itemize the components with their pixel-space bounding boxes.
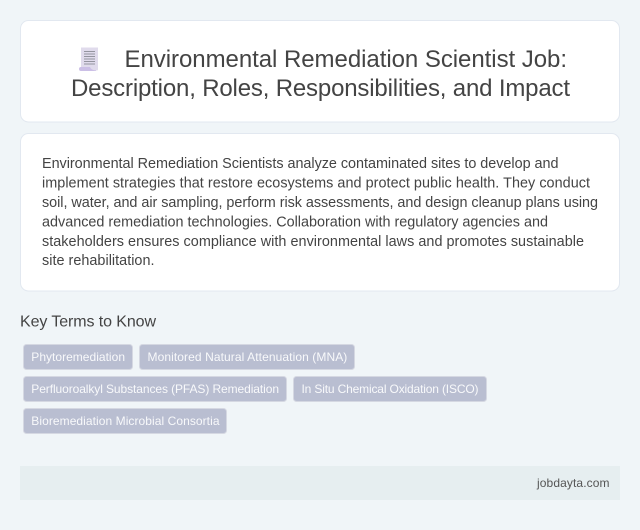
chip: PFAS: Perfluoroalkyl Substances (PFAS) Remediation	[31, 382, 279, 396]
description text	[42, 156, 598, 269]
header panel	[20, 20, 620, 122]
description text: soil, water, and air sampling, perform risk assessments, and design cleanup plans using	[42, 195, 598, 211]
chip: bioremediation	[24, 408, 226, 434]
chip: PFAS	[24, 376, 286, 402]
description text: site rehabilitation.	[42, 253, 154, 269]
description text: Environmental Remediation Scientists analyze contaminated sites to develop and	[42, 156, 558, 172]
chip: ISCO: In Situ Chemical Oxidation (ISCO)	[302, 382, 478, 396]
description text: advanced remediation technologies. Collaboration with regulatory agencies and	[42, 214, 548, 230]
key terms chips	[24, 344, 486, 434]
title	[71, 46, 570, 102]
icon: document scroll	[79, 48, 98, 71]
chip: MNA	[140, 344, 354, 370]
title: Environmental Remediation Scientist Job:	[124, 46, 567, 73]
description text: stakeholders ensures compliance with environmental laws and promotes sustainable	[42, 234, 584, 250]
chip: phytoremediation: Phytoremediation	[31, 350, 125, 364]
chip: bioremediation: Bioremediation Microbial Consortia	[31, 414, 220, 428]
chip: ISCO	[294, 376, 486, 402]
description text: implement strategies that restore ecosystems and protect public health. They conduct	[42, 176, 590, 192]
description panel	[20, 134, 620, 291]
footer bar	[20, 466, 620, 500]
footer bar: jobdayta.com	[536, 476, 610, 490]
title: Description, Roles, Responsibilities, and Impact	[71, 75, 570, 102]
chip: MNA: Monitored Natural Attenuation (MNA)	[148, 350, 347, 364]
chip: phytoremediation	[24, 344, 132, 370]
heading: key terms: Key Terms to Know	[20, 314, 156, 330]
